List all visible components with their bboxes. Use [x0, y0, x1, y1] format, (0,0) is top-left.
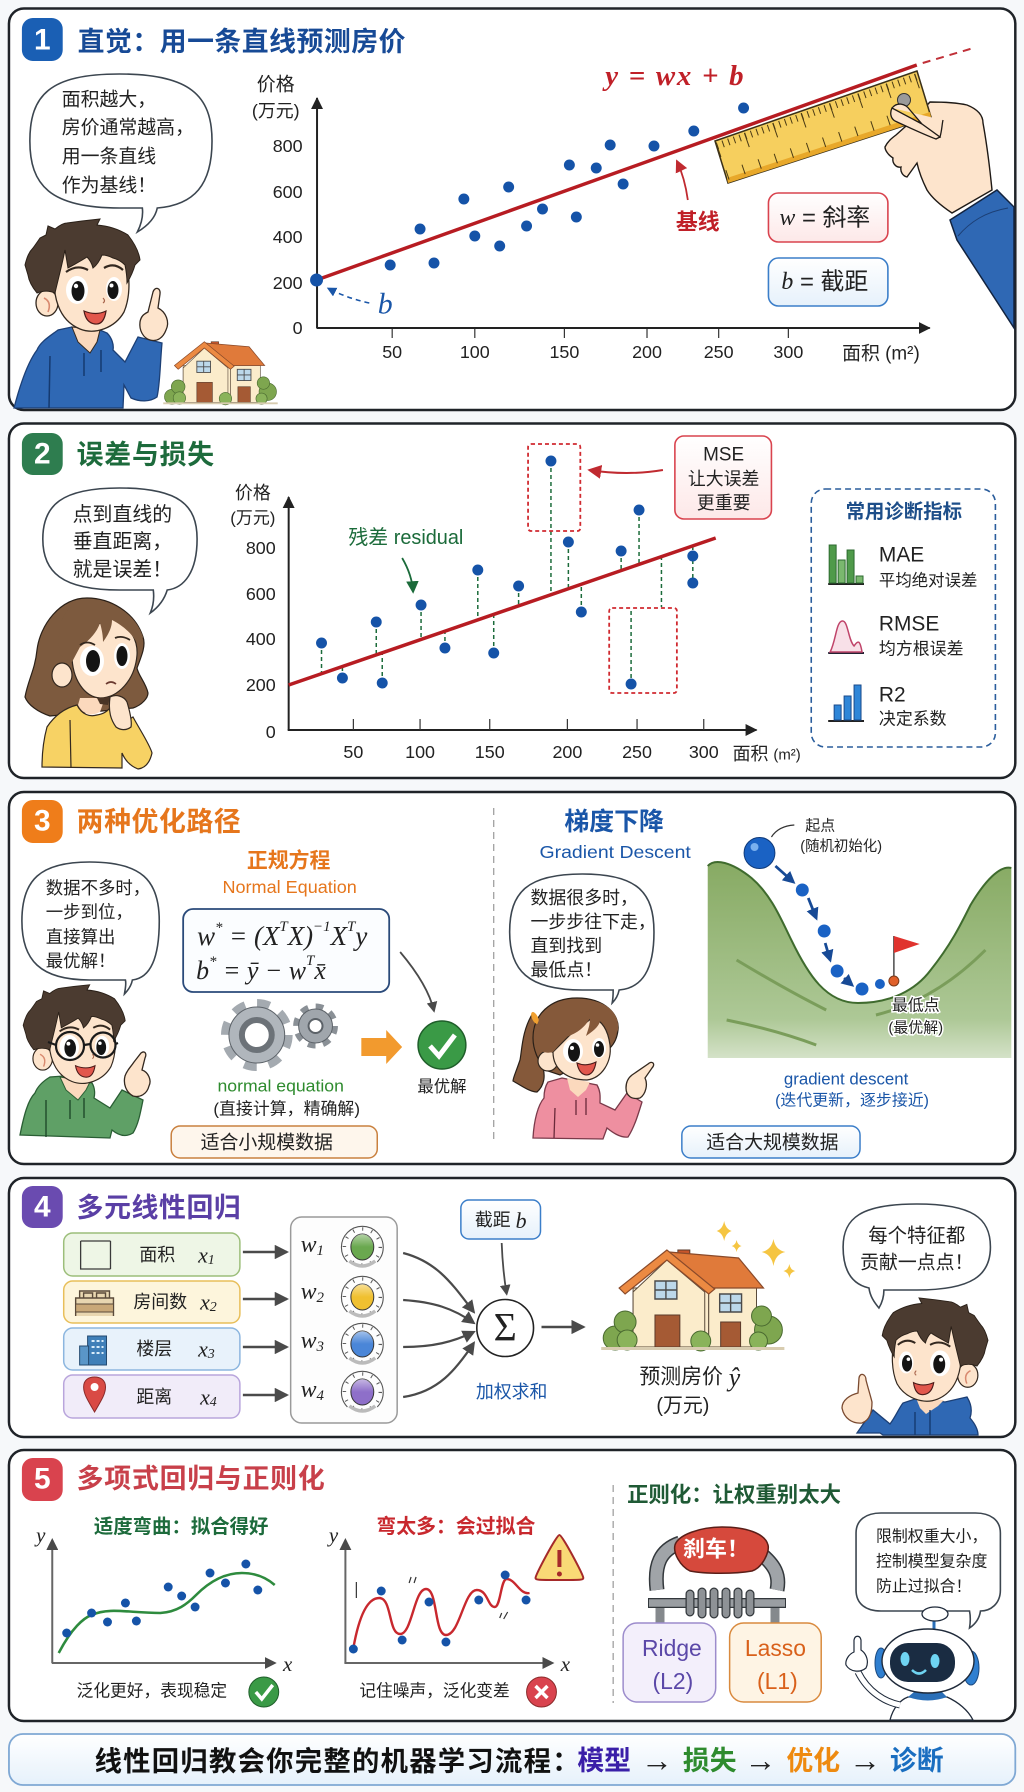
- weights panel: w: [301, 1279, 317, 1305]
- label: lowest point: 最低点: [892, 996, 940, 1015]
- speech bubble: 直到找到: [531, 936, 602, 956]
- arrow: intercept to sum: [502, 1243, 507, 1294]
- x axis: [288, 729, 757, 731]
- tag: large data: [682, 1126, 860, 1158]
- character: girl with ponytail: [513, 998, 654, 1139]
- axis labels: 0: [293, 318, 303, 338]
- label: normal equation: (直接计算，精确解): [213, 1099, 360, 1119]
- axis labels: 50: [343, 742, 363, 762]
- illustration: hill valley: [708, 862, 1011, 1058]
- label: optimum: 最优解: [417, 1078, 467, 1096]
- badge 5: 5: [34, 1462, 51, 1496]
- equation: y = wx + b: [602, 60, 744, 92]
- weights panel: 2: [317, 1290, 325, 1306]
- speech bubble: 一步步往下走，: [531, 912, 656, 932]
- label: baseline: 基线: [676, 209, 720, 235]
- speech bubble: 防止过拟合！: [876, 1577, 971, 1596]
- axis labels: 面积 (m²): [842, 342, 920, 365]
- axis labels: 800: [273, 136, 303, 156]
- formula box: x̄: [313, 955, 326, 985]
- callout: b intercept: b = 截距: [781, 268, 868, 296]
- speech bubble: 数据不多时，: [46, 878, 150, 898]
- label: start point: 起点: [805, 817, 835, 835]
- axis labels: 150: [475, 742, 505, 762]
- heading: 直觉：用一条直线预测房价: [78, 27, 406, 57]
- tag: large data: 适合大规模数据: [706, 1131, 839, 1154]
- badge 1: [22, 18, 63, 61]
- label: residual: 残差 residual: [348, 526, 463, 549]
- formula box: *: [215, 920, 223, 936]
- chart: good fit: y: [34, 1523, 46, 1547]
- illustration: brake with spring: [648, 1527, 786, 1625]
- metric: MAE: [828, 543, 977, 590]
- axis labels: 价格: [257, 73, 295, 96]
- panel: 4 multivariate regression: [9, 1178, 1015, 1437]
- arrow: baseline pointer: [677, 161, 688, 200]
- arrow: →: [641, 1742, 673, 1778]
- speech bubble: 最优解！: [46, 951, 115, 971]
- speech bubble: 控制模型复杂度: [876, 1552, 987, 1571]
- label: lowest point: [888, 996, 943, 1037]
- balls and descent path: [744, 838, 885, 996]
- flow: diagnose: 诊断: [890, 1746, 944, 1776]
- axis labels: 300: [773, 342, 803, 362]
- speech bubble: 房价通常越高，: [62, 116, 194, 139]
- speech bubble: 数据很多时，: [531, 888, 638, 908]
- speech bubble: [22, 862, 159, 994]
- feature: area: x: [198, 1242, 208, 1268]
- box: Ridge: (L2): [653, 1668, 693, 1694]
- heading: normal equation: 正规方程: [247, 848, 331, 873]
- formula box: w: [197, 921, 215, 951]
- label: normal equation: [213, 1076, 360, 1119]
- character: boy with glasses: [20, 985, 150, 1138]
- metric: R2: [828, 683, 947, 729]
- speech bubble: 作为基线！: [62, 174, 156, 197]
- chart: residuals: [230, 444, 801, 764]
- formula box: y: [352, 921, 367, 951]
- chart: good fit: 泛化更好，表现稳定: [77, 1681, 227, 1701]
- heading: 多元线性回归: [77, 1193, 241, 1223]
- label: gradient descent: gradient descent: [784, 1069, 909, 1089]
- axis labels: 600: [246, 584, 276, 604]
- arrow: formula to solution: [400, 952, 434, 1011]
- formula box: −1: [313, 919, 331, 935]
- regression line: [317, 48, 974, 280]
- feature: distance: [64, 1375, 240, 1418]
- formula box: T: [347, 919, 357, 935]
- chart: overfit: 记住噪声，泛化变差: [359, 1681, 510, 1701]
- panel: 5 polynomial and regularisation: [9, 1450, 1015, 1721]
- arrows: weights to sum: [403, 1253, 474, 1397]
- icon: house: [601, 1250, 784, 1351]
- callout: MSE: 让大误差: [688, 469, 759, 489]
- panel: 3 optimisation paths: [9, 792, 1015, 1164]
- chart: overfit: [327, 1514, 571, 1707]
- axis labels: 200: [273, 273, 303, 293]
- feature: rooms: 2: [210, 1299, 217, 1315]
- feature: area: [64, 1233, 240, 1276]
- metric: RMSE: RMSE: [879, 612, 939, 636]
- axis labels: [230, 483, 801, 764]
- feature: rooms: 房间数: [133, 1292, 187, 1312]
- speech bubble: 贡献一点点！: [860, 1251, 973, 1274]
- badge 2: 2: [34, 437, 51, 471]
- feature: area: 面积: [139, 1245, 175, 1265]
- flow: model: 模型: [577, 1746, 631, 1776]
- speech bubble: 直接算出: [46, 927, 115, 947]
- weights panel: w: [301, 1232, 317, 1258]
- speech bubble: 就是误差！: [73, 558, 172, 581]
- badge 1: 1: [34, 23, 51, 57]
- feature: distance: 距离: [136, 1387, 172, 1407]
- axis labels: 150: [549, 342, 579, 362]
- metric: MAE: 平均绝对误差: [879, 572, 977, 590]
- callout: MSE: [675, 436, 771, 519]
- feature: floors: 3: [207, 1346, 215, 1362]
- speech bubble: [43, 488, 197, 613]
- label: lowest point: (最优解): [888, 1019, 943, 1037]
- callout: b intercept: [768, 258, 888, 306]
- icon: gears: [226, 1004, 334, 1066]
- chart: good fit: x: [282, 1652, 293, 1676]
- label: predicted price: [639, 1362, 741, 1417]
- heading: regularisation: 正则化：让权重别太大: [627, 1483, 841, 1507]
- axis labels: 100: [405, 742, 435, 762]
- formula box: T: [279, 919, 289, 935]
- label: predicted price: 预测房价 ŷ: [639, 1362, 741, 1392]
- heading: normal equation: Normal Equation: [222, 877, 357, 897]
- box: Lasso: (L1): [757, 1668, 798, 1694]
- label: gradient descent: [775, 1069, 929, 1110]
- feature: area: 1: [208, 1252, 215, 1268]
- footer banner: [9, 1734, 1015, 1785]
- sum node: Σ: [494, 1304, 517, 1350]
- highlight boxes: [528, 444, 677, 693]
- speech bubble: [843, 1204, 990, 1308]
- badge 4: 4: [34, 1190, 51, 1224]
- speech bubble: 点到直线的: [73, 503, 172, 526]
- regression line: [289, 538, 716, 685]
- weights panel: 4: [317, 1388, 325, 1404]
- axis labels: 600: [273, 182, 303, 202]
- axis labels: (m²): [773, 746, 801, 764]
- feature: distance: 4: [210, 1394, 217, 1410]
- axis labels: 200: [552, 742, 582, 762]
- icon: warning: [536, 1535, 583, 1580]
- intercept box: 截距 b: [475, 1207, 527, 1233]
- tag: small data: 适合小规模数据: [201, 1131, 333, 1154]
- intercept marker: b: [378, 287, 393, 321]
- speech bubble: 限制权重大小，: [876, 1527, 987, 1546]
- formula box: T: [306, 953, 316, 969]
- panel: 2 error and loss: [9, 424, 1015, 778]
- metric: R2: R2: [879, 683, 906, 707]
- axis labels: 200: [632, 342, 662, 362]
- heading: gradient descent: Gradient Descent: [540, 842, 691, 862]
- heading: 误差与损失: [77, 440, 215, 470]
- speech bubble: [856, 1513, 1000, 1628]
- metric: RMSE: [828, 612, 964, 659]
- callout: MSE: 更重要: [697, 493, 750, 513]
- axis labels: 200: [246, 675, 276, 695]
- box: Ridge: Ridge: [642, 1635, 702, 1661]
- character: robot: [846, 1607, 979, 1720]
- formula box: *: [209, 954, 217, 970]
- formula box: [183, 909, 389, 992]
- axis labels: 300: [689, 742, 719, 762]
- formula box: X): [287, 921, 313, 951]
- data points: [310, 102, 749, 286]
- badge 5: [22, 1458, 63, 1501]
- arrow: sum to house: [541, 1326, 583, 1328]
- badge 3: [22, 800, 63, 843]
- character: boy thumbs up: [842, 1298, 988, 1435]
- icon: small house: [163, 342, 278, 405]
- badge 3: 3: [34, 804, 51, 838]
- arrow: →: [849, 1742, 881, 1778]
- axis labels: 250: [704, 342, 734, 362]
- axis labels: 400: [246, 629, 276, 649]
- weights panel: w: [301, 1328, 317, 1354]
- flag: [889, 936, 920, 986]
- feature: floors: 楼层: [136, 1339, 172, 1359]
- axis labels: [252, 73, 920, 365]
- diagnostics title: 常用诊断指标: [846, 500, 962, 523]
- speech bubble: 面积越大，: [62, 88, 156, 111]
- callout: w slope: [768, 193, 888, 242]
- box: Lasso: Lasso: [745, 1635, 806, 1661]
- arrow: residual: [402, 558, 413, 592]
- chart: overfit: 弯太多：会过拟合: [376, 1514, 536, 1538]
- panel: diagnostics: [811, 489, 995, 747]
- residual lines: [322, 461, 693, 684]
- axis labels: 价格: [235, 483, 271, 503]
- intercept box: [461, 1200, 541, 1239]
- label: normal equation: normal equation: [217, 1076, 344, 1096]
- axis labels: 50: [382, 342, 402, 362]
- x axis: [317, 327, 930, 329]
- chart: overfit: y: [327, 1523, 339, 1547]
- badge 4: [22, 1186, 63, 1228]
- feature: floors: x: [198, 1336, 208, 1362]
- heading: 两种优化路径: [77, 807, 241, 837]
- arrow: MSE to outlier: [589, 470, 663, 473]
- badge 2: [22, 433, 63, 475]
- axis labels: (万元): [230, 508, 275, 528]
- metric: RMSE: 均方根误差: [879, 639, 964, 659]
- axis labels: 400: [273, 227, 303, 247]
- chart: good fit: 适度弯曲：拟合得好: [94, 1515, 268, 1538]
- tag: small data: [171, 1126, 377, 1158]
- arrow: orange: [361, 1030, 402, 1064]
- chart: good fit: [34, 1515, 293, 1707]
- metric: R2: 决定系数: [879, 709, 947, 729]
- panel: 1 intuition: [9, 8, 1015, 410]
- weights panel: w: [301, 1377, 317, 1403]
- heading: normal equation: [222, 848, 357, 897]
- flow: optimise: 优化: [786, 1746, 840, 1776]
- label: weighted sum: 加权求和: [476, 1382, 547, 1402]
- flow: loss: 损失: [683, 1746, 737, 1776]
- intercept marker: [327, 287, 393, 321]
- chart: overfit: x: [560, 1652, 571, 1676]
- speech bubble: 最低点！: [531, 960, 602, 980]
- weights panel: 1: [317, 1243, 324, 1259]
- formula box: b: [196, 955, 209, 985]
- weights panel: [291, 1217, 397, 1423]
- sparkles: [717, 1221, 795, 1278]
- speech bubble: 一步到位，: [46, 902, 133, 922]
- feature: distance: x: [200, 1384, 210, 1410]
- axis labels: 250: [622, 742, 652, 762]
- axis labels: 0: [266, 722, 276, 742]
- icon: ruler and hand: [715, 71, 1014, 328]
- speech bubble: 垂直距离，: [73, 530, 172, 553]
- feature: floors: [64, 1328, 240, 1370]
- formula box: = ȳ − w: [216, 955, 307, 985]
- heading: gradient descent: 梯度下降: [564, 808, 664, 836]
- speech bubble: 用一条直线: [62, 145, 156, 168]
- character: boy pointing: [14, 219, 168, 408]
- box: Ridge: [623, 1623, 716, 1702]
- icon: green check: [418, 1021, 466, 1069]
- character: thinking girl: [25, 598, 152, 769]
- label: start point: [771, 817, 882, 855]
- y axis: [288, 497, 290, 730]
- chart: scatter with baseline: [252, 48, 974, 365]
- metric: MAE: MAE: [879, 543, 924, 567]
- sum node: [477, 1300, 534, 1356]
- y axis: [316, 98, 318, 328]
- feature: rooms: [64, 1281, 240, 1323]
- box: Lasso: [730, 1623, 821, 1702]
- axis labels: 100: [460, 342, 490, 362]
- axis labels: 面积: [733, 744, 768, 764]
- speech bubble: 每个特征都: [868, 1225, 965, 1247]
- label: gradient descent: (迭代更新，逐步接近): [775, 1091, 929, 1110]
- footer statement: 线性回归教会你完整的机器学习流程：: [95, 1745, 581, 1777]
- feature: rooms: x: [200, 1289, 210, 1315]
- axis labels: (万元): [252, 101, 300, 121]
- label: predicted price: (万元): [656, 1395, 709, 1417]
- arrow: →: [745, 1742, 776, 1778]
- speech bubble: [30, 74, 212, 232]
- data points: [316, 456, 698, 690]
- illustration: brake with spring: 刹车！: [683, 1537, 749, 1562]
- arrows: feature to weight: [243, 1252, 287, 1395]
- heading: gradient descent: [540, 808, 691, 862]
- callout: MSE: MSE: [703, 444, 744, 466]
- formula box: = (X: [222, 921, 281, 951]
- label: start point: (随机初始化): [800, 838, 882, 855]
- axis labels: 800: [246, 538, 276, 558]
- callout: w slope: w = 斜率: [779, 204, 870, 232]
- heading: 多项式回归与正则化: [77, 1464, 326, 1494]
- speech bubble: [510, 874, 656, 1003]
- weights panel: 3: [316, 1339, 324, 1355]
- formula box: X: [330, 921, 349, 951]
